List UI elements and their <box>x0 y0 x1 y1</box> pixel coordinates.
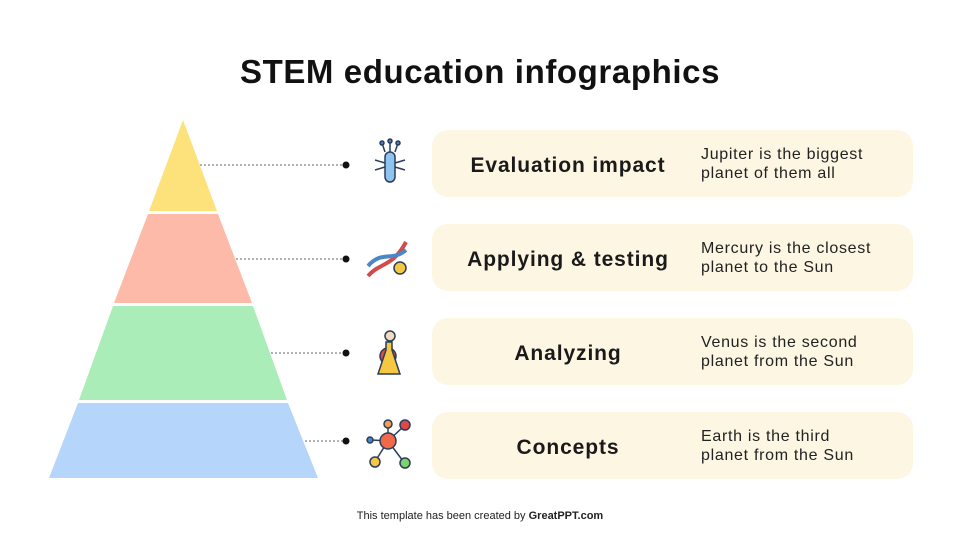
icon: flask <box>378 331 400 374</box>
card: concepts <box>432 412 913 479</box>
card: analyzing: Analyzing <box>514 342 622 365</box>
card: analyzing <box>432 318 913 385</box>
card: evaluation: Jupiter is the biggest <box>701 146 863 163</box>
title: STEM education infographics <box>240 53 720 90</box>
card: evaluation <box>432 130 913 197</box>
card: evaluation: Evaluation impact <box>470 154 666 177</box>
card: applying: Applying & testing <box>467 248 669 271</box>
pyramid <box>49 120 318 478</box>
icon: molecule <box>367 420 410 468</box>
card: concepts: planet from the Sun <box>701 447 854 464</box>
card: evaluation: planet of them all <box>701 165 835 182</box>
connector lines <box>200 165 346 441</box>
icon: test tube <box>375 139 405 182</box>
card: analyzing: planet from the Sun <box>701 353 854 370</box>
card: analyzing: Venus is the second <box>701 334 858 351</box>
card: applying: Mercury is the closest <box>701 240 871 257</box>
card: concepts: Concepts <box>517 436 619 459</box>
card: applying: planet to the Sun <box>701 259 834 276</box>
card: concepts: Earth is the third <box>701 428 830 445</box>
icon: dna <box>368 242 406 276</box>
card: applying <box>432 224 913 291</box>
footer: This template has been created by GreatPPT.com <box>357 510 603 522</box>
